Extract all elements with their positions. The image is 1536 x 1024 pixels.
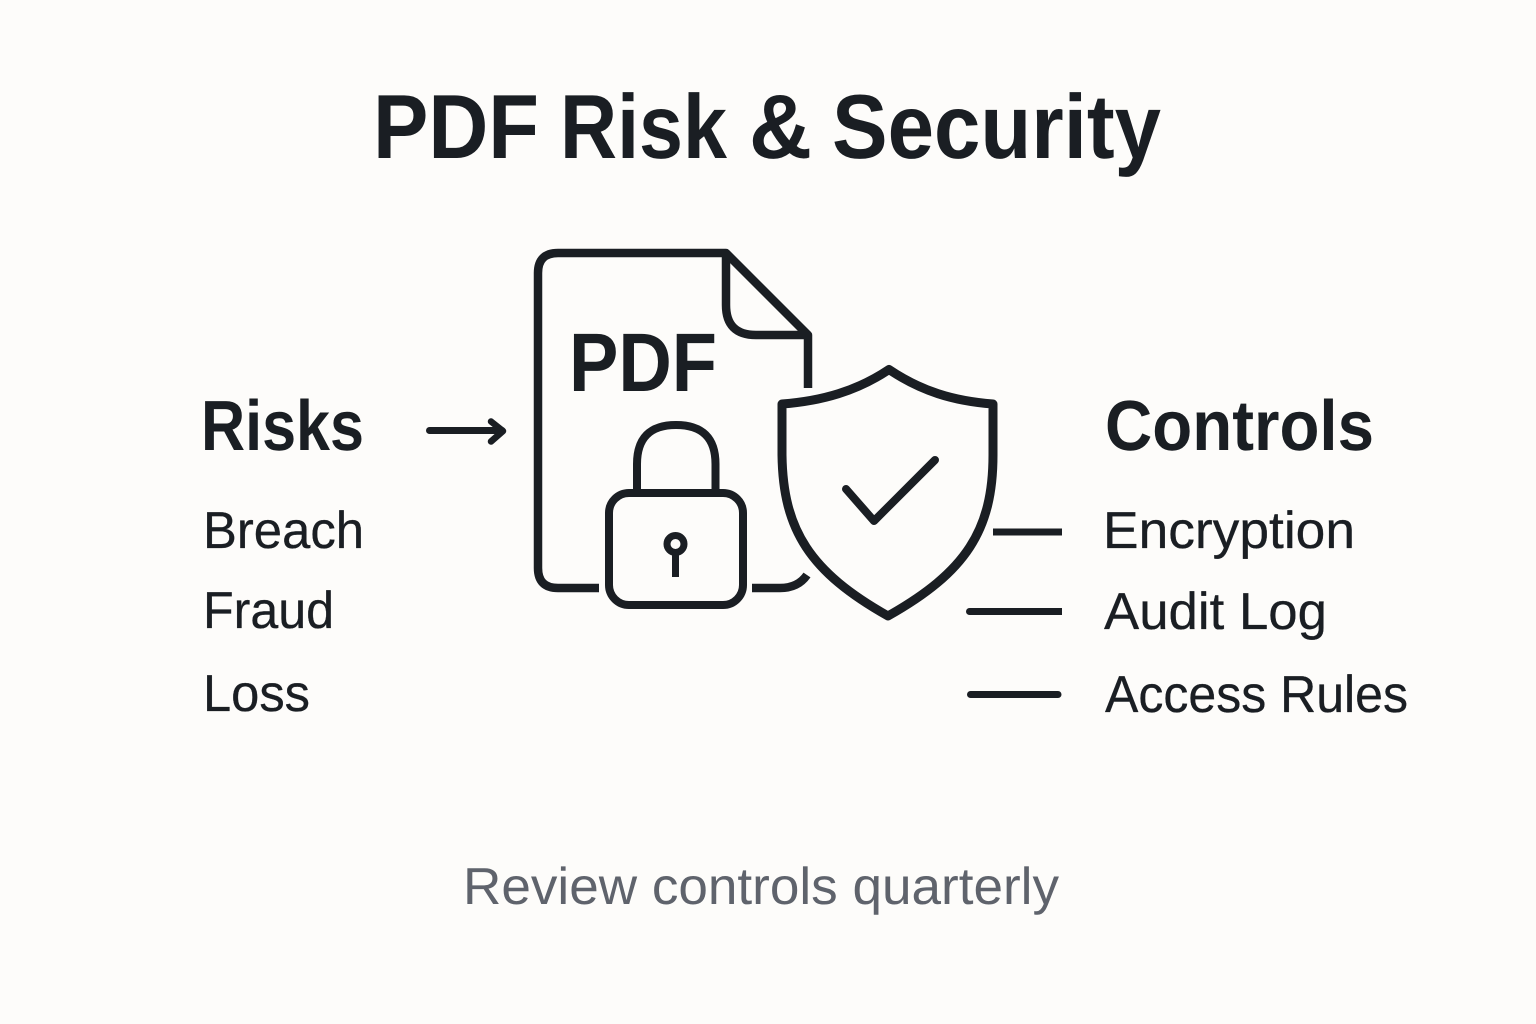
list: controls: Access Rules [1105,666,1408,724]
list: risks [203,502,364,723]
document label: PDF [569,316,717,409]
icon: padlock [609,425,743,605]
title: Risk [560,77,727,178]
title: PDF [373,77,539,178]
heading: risks: Risks [201,387,364,466]
list: controls [1103,502,1408,724]
panel: risks [201,387,364,723]
connector lines: controls [970,532,1062,694]
title [373,77,1161,178]
list: risks: Breach [203,502,364,560]
icon: document [538,253,808,588]
list: controls: Encryption [1103,502,1355,560]
icon: shield with check [782,370,993,616]
list: controls: Audit Log [1104,583,1327,641]
footer note: Review controls quarterly [463,858,1059,916]
arrow: risks to document [430,422,503,442]
list: risks: Fraud [203,582,334,640]
heading: controls: Controls [1105,387,1374,466]
list: risks: Loss [203,665,310,723]
title: & [749,77,812,178]
title: Security [832,77,1161,178]
panel: controls [1103,387,1408,724]
